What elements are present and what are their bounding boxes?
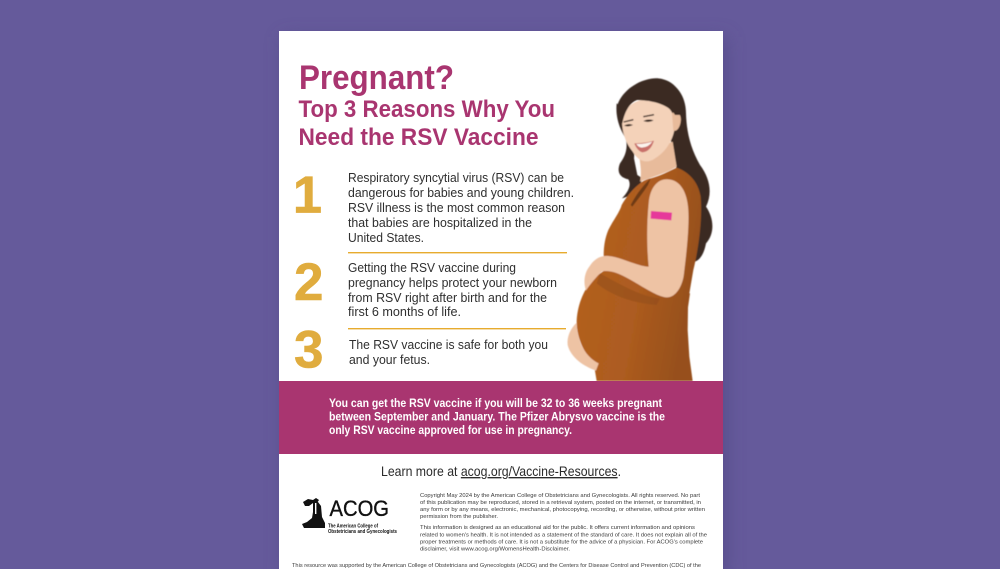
reason 2 text: pregnancy helps protect your newborn — [348, 275, 557, 290]
reason 2 text — [348, 260, 557, 319]
reason 1 text: Respiratory syncytial virus (RSV) can be — [348, 170, 564, 185]
number 3: 3 — [294, 320, 323, 380]
reason 1 text: United States. — [348, 230, 424, 245]
disclaimer text: disclaimer, visit www.acog.org/WomensHealth-Disclaimer. — [420, 546, 570, 552]
dress — [577, 168, 701, 381]
photo: pregnant woman with bandage on arm — [568, 78, 712, 381]
reason 2 text: first 6 months of life. — [348, 304, 461, 319]
arm and hand — [584, 179, 689, 297]
support statement: This resource was supported by the American College of Obstetricians and Gynecologists (ACOG) and the Centers for Disease Control and Prevention (CDC) of the — [292, 563, 701, 569]
title: Pregnant? — [299, 59, 454, 97]
ACOG logo: ACOG — [330, 496, 389, 521]
copyright text: any form or by any means, electronic, mechanical, photocopying, recording, or otherwise, without prior written — [420, 507, 705, 513]
banner — [279, 381, 723, 454]
disclaimer text: proper treatments or methods of care. It is not a substitute for the advice of a physician. For ACOG's complete — [420, 540, 703, 546]
number 2: 2 — [294, 253, 323, 312]
banner text: only RSV vaccine approved for use in pregnancy. — [329, 424, 572, 437]
icon: seated figure — [302, 498, 325, 528]
title: Top 3 Reasons Why You — [298, 96, 555, 123]
copyright text: Copyright May 2024 by the American College of Obstetricians and Gynecologists. All rights reserved. No part — [420, 493, 700, 499]
title — [298, 59, 555, 151]
hair front — [617, 78, 684, 123]
title: Need the RSV Vaccine — [298, 124, 538, 151]
ACOG logo — [302, 496, 397, 535]
neck — [639, 142, 677, 182]
copyright text: permission from the publisher. — [420, 514, 498, 520]
disclaimer text — [420, 525, 707, 552]
reason 3 text — [349, 337, 548, 367]
back hair left — [616, 103, 643, 198]
reason 1 text: RSV illness is the most common reason — [348, 200, 565, 215]
copyright text: of this publication may be reproduced, stored in a retrieval system, posted on the internet, or transmitted, in — [420, 500, 701, 506]
reason 2 text: Getting the RSV vaccine during — [348, 260, 516, 275]
bandage — [651, 211, 672, 220]
copyright text — [420, 493, 705, 520]
ACOG logo: The American College of — [328, 524, 378, 530]
learn more link: Learn more at acog.org/Vaccine-Resources. — [381, 464, 621, 479]
lower hand — [568, 323, 599, 371]
disclaimer text: related to women's health. It is not intended as a statement of the standard of care. It does not explain all of the — [420, 532, 707, 538]
banner text: You can get the RSV vaccine if you will be 32 to 36 weeks pregnant — [329, 397, 662, 410]
banner text — [329, 397, 666, 437]
ACOG logo: Obstetricians and Gynecologists — [328, 529, 397, 535]
reason 3 text: and your fetus. — [349, 352, 430, 367]
back hair right — [660, 80, 712, 262]
number 1: 1 — [293, 166, 322, 224]
face — [622, 99, 675, 161]
reason 1 text: that babies are hospitalized in the — [348, 215, 532, 230]
panel: flyer page — [279, 31, 723, 569]
reason 1 text: dangerous for babies and young children. — [348, 185, 574, 200]
reason 1 text — [348, 170, 574, 245]
reason 2 text: from RSV right after birth and for the — [348, 290, 547, 305]
eyes, brows, smile — [624, 115, 654, 122]
disclaimer text: This information is designed as an educational aid for the public. It offers current information and opinions — [420, 525, 695, 531]
banner text: between September and January. The Pfizer Abrysvo vaccine is the — [329, 410, 666, 424]
reason 3 text: The RSV vaccine is safe for both you — [349, 337, 548, 352]
